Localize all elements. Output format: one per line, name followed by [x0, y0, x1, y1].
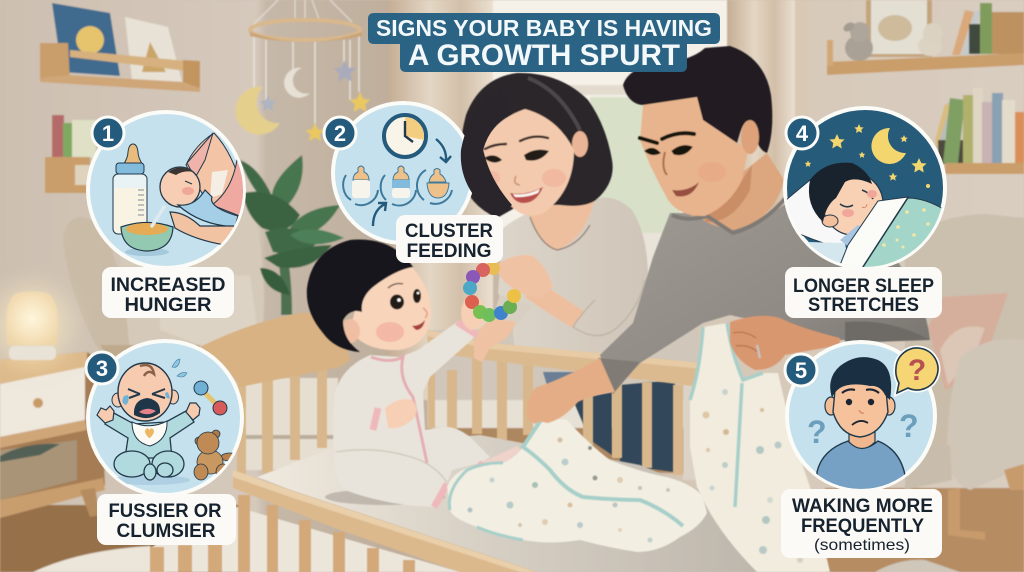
sign 3: fussier or clumsier — [86, 341, 242, 545]
rug — [33, 546, 165, 572]
lower wall, baseboard and floor behind crib — [428, 330, 703, 480]
father face — [640, 97, 748, 216]
mother ear — [572, 131, 588, 157]
rainbow teething ring — [463, 261, 521, 322]
icon circle 5 — [787, 342, 935, 495]
top-left shelf — [40, 3, 200, 92]
parent jeans behind crib — [543, 372, 675, 472]
sleep sack — [690, 323, 830, 572]
front crib rail and bars — [150, 470, 537, 572]
banner shape — [368, 13, 720, 72]
father forearm and hand on blanket — [526, 358, 615, 424]
tear drops — [172, 359, 187, 377]
lower-right bookshelf — [935, 88, 1024, 174]
label 3: CLUMSIER — [116, 521, 216, 542]
father right hand holding sleep sack — [730, 316, 840, 370]
blanket trim — [449, 463, 523, 540]
number badge 1 — [92, 117, 124, 149]
head — [833, 381, 888, 437]
mother sweater — [498, 198, 648, 358]
sleeve fold — [573, 280, 645, 336]
crib side under rail — [150, 505, 460, 572]
mother forearm — [525, 280, 585, 328]
label 4: LONGER SLEEP — [793, 276, 934, 297]
moon and stars — [805, 124, 930, 188]
father neck — [690, 153, 784, 230]
number badge 4: 4 — [796, 121, 809, 146]
baby head — [112, 363, 178, 421]
icon circle 3 — [88, 341, 242, 495]
label 1 — [102, 267, 234, 318]
label 5: (sometimes) — [814, 537, 910, 554]
icon circle 4 — [775, 108, 950, 272]
blanket prints — [468, 438, 670, 542]
sign 4: longer sleep stretches — [775, 108, 950, 318]
bottle — [124, 144, 142, 163]
mobile — [235, 0, 370, 141]
icon circle 2 — [333, 88, 512, 243]
headboard — [200, 313, 350, 387]
face features — [842, 389, 879, 425]
label 4: STRETCHES — [808, 295, 919, 316]
left armchair — [63, 214, 338, 470]
label 3: FUSSIER OR — [108, 501, 222, 522]
pink cuffs — [373, 322, 487, 507]
mother — [460, 73, 648, 358]
floor shadow — [110, 475, 190, 485]
neck — [849, 428, 875, 448]
label 4 — [785, 267, 942, 318]
sign 5: waking more frequently — [781, 342, 942, 558]
label 5: FREQUENTLY — [801, 516, 924, 537]
onesie placket — [371, 357, 427, 463]
icon circle 1 — [88, 112, 250, 268]
hair highlight — [528, 78, 580, 130]
curtains — [388, 0, 809, 400]
sign 2: cluster feeding — [324, 88, 512, 263]
bed sheet — [808, 242, 847, 265]
baby hand on ring — [461, 296, 485, 330]
blanket white fold — [840, 197, 908, 268]
baby foot — [480, 446, 523, 470]
side question marks: ? — [807, 414, 827, 450]
mother neck — [528, 185, 595, 250]
lamp — [6, 292, 58, 360]
crib mattress — [257, 435, 765, 572]
mother sleeve — [492, 295, 533, 325]
speech bubble with question mark — [896, 348, 938, 393]
baby shadow — [325, 489, 445, 505]
label 1: HUNGER — [124, 295, 212, 316]
blanket — [447, 417, 707, 552]
baby face — [350, 267, 431, 350]
sweater collar — [672, 195, 788, 233]
floor — [0, 505, 240, 572]
plant — [240, 155, 344, 315]
title text: A GROWTH SPURT — [408, 39, 680, 72]
back rail and bars of crib — [200, 313, 703, 475]
number badge 2 — [324, 117, 356, 149]
leg fold shading — [336, 450, 447, 483]
number badge 3 — [86, 352, 118, 384]
clock arrow — [436, 139, 451, 162]
father hair — [623, 46, 772, 153]
father features — [640, 133, 726, 196]
father — [598, 46, 930, 394]
baby hands — [97, 406, 114, 423]
bowl — [125, 249, 169, 256]
sweater lower sleeve — [845, 321, 930, 343]
baby head — [160, 167, 200, 207]
shelf base — [40, 75, 200, 92]
title text: SIGNS YOUR BABY IS HAVING — [376, 15, 712, 41]
label 5: WAKING MORE — [792, 496, 933, 517]
sign 1: increased hunger — [88, 112, 250, 318]
number badge 5 — [785, 354, 817, 386]
baby features — [376, 284, 427, 342]
number badge 3: 3 — [96, 356, 108, 381]
top-right shelf with objects — [827, 0, 1024, 75]
mother features — [484, 137, 566, 203]
lower arrow — [373, 203, 386, 226]
side question marks: ? — [899, 408, 919, 444]
mother feeding — [186, 133, 245, 225]
shirt — [817, 441, 905, 495]
pajama collar — [840, 225, 860, 246]
teal blanket — [862, 198, 942, 267]
baby onesie body — [333, 322, 490, 507]
mother hand holding ring — [497, 255, 553, 298]
baby blue body — [178, 190, 238, 227]
ears — [825, 397, 837, 415]
sleeping baby face — [809, 163, 883, 235]
teddy bear — [194, 430, 232, 480]
shelf back rail — [70, 50, 197, 72]
bottle 3 — [417, 168, 452, 204]
jaw shadow — [705, 165, 752, 222]
bib — [132, 421, 167, 446]
number badge 4 — [786, 117, 818, 149]
window — [470, 0, 730, 363]
lamp glow — [0, 285, 72, 365]
plush toys — [842, 21, 943, 61]
mother lower hand on rail — [474, 295, 533, 362]
pillow — [786, 179, 846, 244]
number badge 2: 2 — [334, 121, 346, 146]
baby hair — [307, 240, 413, 352]
right armchair — [905, 214, 1024, 540]
clock — [384, 115, 426, 157]
number badge 1: 1 — [102, 121, 114, 146]
label 2: FEEDING — [406, 241, 492, 262]
label 2 — [396, 215, 503, 263]
mother face — [483, 109, 574, 216]
baby — [307, 240, 523, 507]
mother's hair overlapping circle — [461, 88, 512, 218]
label 2: CLUSTER — [405, 221, 493, 242]
shelf left end — [40, 43, 70, 82]
wedding ring — [757, 345, 760, 358]
sweater cuff — [598, 358, 640, 394]
number badge 5: 5 — [795, 358, 807, 383]
nightstand — [0, 352, 105, 518]
baby ear — [340, 319, 360, 343]
bottle 2 — [381, 166, 416, 206]
lower-left shelf — [45, 115, 96, 193]
label 3 — [97, 494, 236, 545]
bottle 1 — [343, 166, 378, 205]
mother hair — [460, 73, 613, 218]
crying baby body — [105, 411, 194, 480]
speech bubble with question mark: ? — [908, 354, 926, 387]
label 5 — [781, 489, 942, 558]
father ear — [741, 120, 759, 154]
bib heart — [145, 428, 154, 438]
father sweater — [600, 193, 930, 393]
shelf right end — [183, 60, 200, 92]
rattle — [194, 381, 227, 415]
label 1: INCREASED — [110, 275, 226, 296]
title banner — [368, 13, 720, 72]
supporting hand — [170, 212, 235, 245]
baby lower hand — [385, 399, 417, 428]
top rail — [427, 330, 703, 387]
hair — [830, 357, 891, 400]
